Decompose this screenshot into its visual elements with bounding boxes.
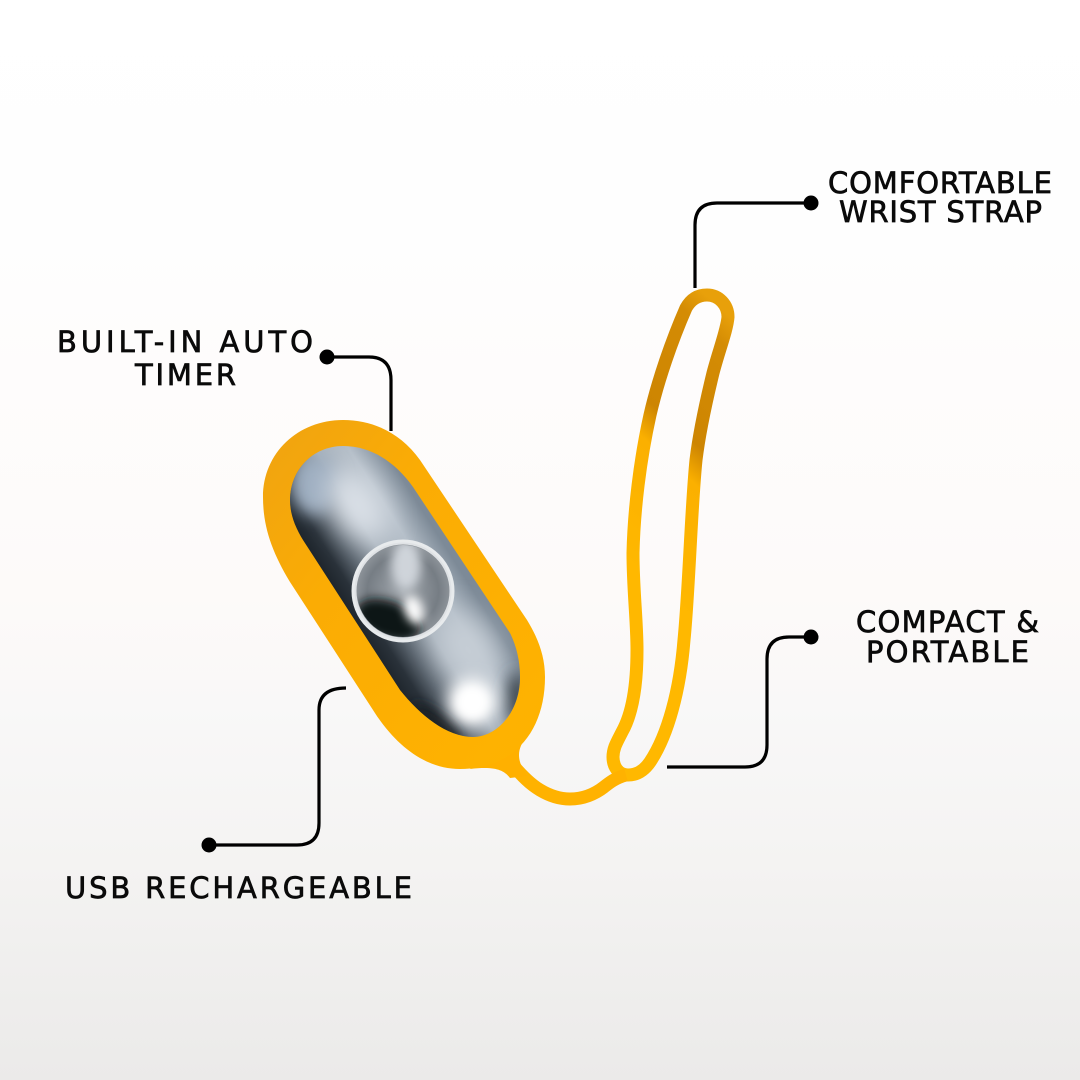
dot xyxy=(804,630,818,644)
callout: comfortable wrist strap xyxy=(695,166,1052,288)
label: BUILT-IN AUTO xyxy=(57,325,313,359)
connector line xyxy=(327,357,391,431)
dot xyxy=(320,350,334,364)
label: PORTABLE xyxy=(866,635,1029,669)
product: wrist device xyxy=(263,295,728,799)
center button xyxy=(350,540,453,649)
label: USB RECHARGEABLE xyxy=(65,871,412,905)
callout: compact and portable xyxy=(667,605,1039,767)
silicone shell xyxy=(263,420,545,769)
label: COMFORTABLE xyxy=(828,166,1052,200)
callout: built-in auto timer xyxy=(57,325,391,431)
connector joint xyxy=(470,715,536,778)
label: WRIST STRAP xyxy=(839,195,1042,229)
wrist strap loop xyxy=(613,295,728,775)
strap connector xyxy=(512,764,626,799)
label: TIMER xyxy=(134,358,236,392)
label xyxy=(57,325,313,392)
callout: usb rechargeable xyxy=(65,688,412,905)
dot xyxy=(202,838,216,852)
label xyxy=(828,166,1052,229)
label xyxy=(856,605,1039,669)
metal face xyxy=(290,446,520,737)
connector line xyxy=(667,637,811,767)
dot xyxy=(804,196,818,210)
connector line xyxy=(695,203,811,288)
connector line xyxy=(209,688,346,845)
label: COMPACT & xyxy=(856,605,1039,639)
